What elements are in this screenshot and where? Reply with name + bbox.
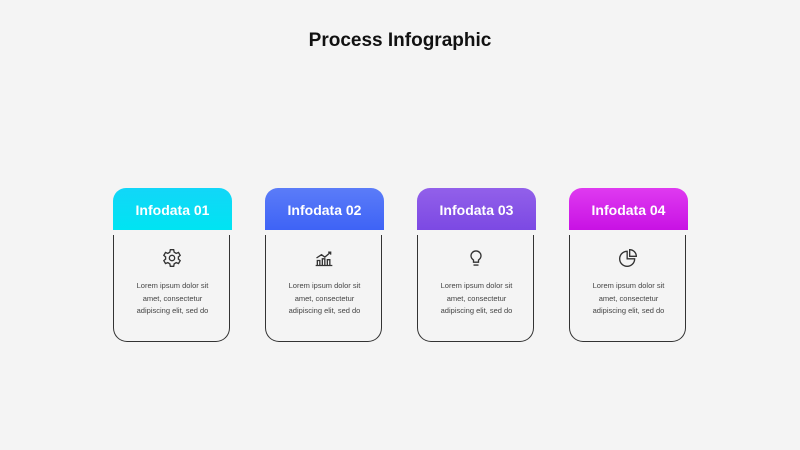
text 1: Lorem ipsum dolor sit [137, 281, 208, 290]
text 2: amet, consectetur [295, 294, 354, 302]
card 2 [265, 188, 384, 342]
text 1: adipiscing elit, sed do [137, 306, 208, 315]
title: Process Infographic [309, 30, 491, 51]
text 4: amet, consectetur [599, 294, 658, 302]
header 1 [113, 188, 232, 230]
header 3: Infodata 03 [440, 202, 513, 218]
body 1 [113, 235, 230, 342]
text 4: adipiscing elit, sed do [593, 306, 664, 315]
icon: pie [619, 249, 637, 267]
card 1 [113, 188, 232, 342]
text 3: amet, consectetur [447, 294, 506, 302]
text 4: Lorem ipsum dolor sit [593, 281, 664, 290]
body 3 [417, 235, 534, 342]
icon: chart [316, 252, 332, 266]
icon: bulb [470, 250, 482, 266]
icon: gear [163, 249, 181, 267]
text 1 [136, 281, 208, 315]
header 1: Infodata 01 [136, 202, 209, 218]
card 3 [417, 188, 536, 342]
text 1: amet, consectetur [143, 294, 202, 302]
text 4 [592, 281, 664, 315]
header 2: Infodata 02 [288, 202, 361, 218]
text 3 [440, 281, 512, 315]
text 2: Lorem ipsum dolor sit [289, 281, 360, 290]
text 3: adipiscing elit, sed do [441, 306, 512, 315]
body 2 [265, 235, 382, 342]
body 4 [569, 235, 686, 342]
header 4: Infodata 04 [592, 202, 665, 218]
text 2: adipiscing elit, sed do [289, 306, 360, 315]
header 2 [265, 188, 384, 230]
text 2 [288, 281, 360, 315]
text 3: Lorem ipsum dolor sit [441, 281, 512, 290]
card 4 [569, 188, 688, 342]
header 4 [569, 188, 688, 230]
header 3 [417, 188, 536, 230]
